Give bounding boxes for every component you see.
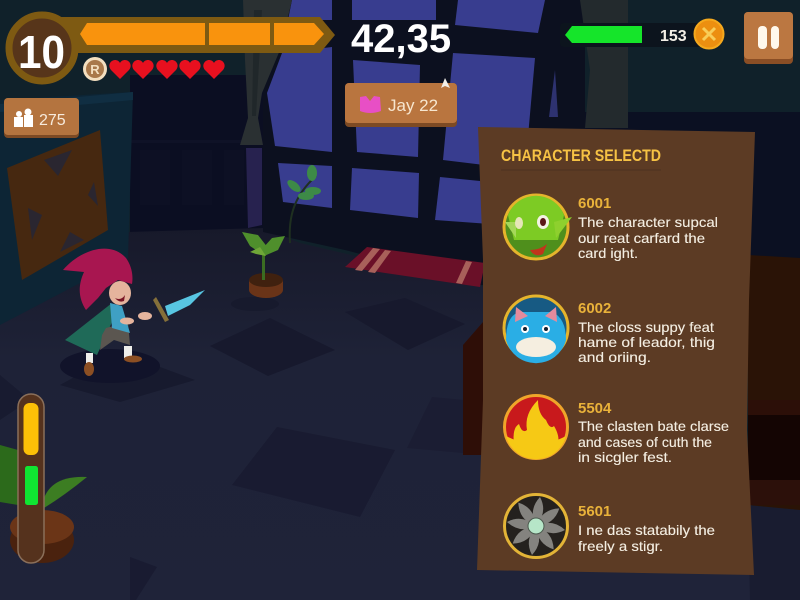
card 6001: card ight.	[578, 245, 638, 261]
score: 42,35	[351, 17, 451, 61]
level badge	[9, 15, 75, 81]
card 6002: and oriing.	[578, 349, 651, 365]
pause button	[744, 12, 793, 64]
rank coin: R	[90, 62, 100, 77]
card 5504	[504, 396, 729, 465]
left cabinet	[0, 92, 133, 325]
players count badge: 275	[39, 112, 66, 129]
potted plant	[231, 232, 285, 311]
icon: shuriken	[504, 494, 568, 558]
icon: cursor	[441, 78, 450, 88]
legs	[100, 322, 130, 350]
card 5504: 5504	[578, 400, 612, 417]
card 5601: freely a stigr.	[578, 538, 663, 554]
card 6001	[504, 195, 718, 261]
card 5504: in sicgler fest.	[578, 449, 672, 465]
level progress bar	[60, 17, 335, 53]
card 5601: I ne das statabily the	[578, 522, 715, 538]
window	[263, 0, 585, 285]
card 6002: The closs suppy feat	[578, 319, 714, 335]
card 6001: our reat carfard the	[578, 230, 705, 246]
hair	[63, 249, 132, 310]
right furniture	[463, 255, 800, 510]
torso	[110, 303, 130, 333]
card 5504: and cases of cuth the	[578, 434, 712, 450]
card 5601	[504, 494, 715, 558]
icon: goblin	[504, 195, 572, 259]
wainscot panels	[130, 140, 260, 143]
hero character with sword	[60, 249, 205, 383]
icon: blue cat	[504, 296, 568, 363]
curtain left	[240, 0, 292, 145]
sword	[165, 290, 205, 316]
rank coin	[83, 57, 107, 81]
card 6001: The character supcal	[578, 214, 718, 230]
lives row	[83, 57, 225, 81]
energy bar and coins	[560, 20, 724, 48]
curtain right	[580, 0, 628, 128]
red rug	[345, 247, 485, 287]
players count badge	[4, 98, 79, 138]
card 5504: The clasten bate clarse	[578, 418, 729, 434]
card 6002: hame of leador, thig	[578, 334, 715, 350]
cape	[65, 303, 112, 355]
icon: coin	[694, 20, 724, 48]
date badge: Jay 22	[388, 96, 438, 115]
heading: CHARACTER SELECTD	[501, 146, 661, 165]
card 5601: 5601	[578, 503, 611, 520]
wooden crossed panel	[7, 130, 108, 280]
card 6001: 6001	[578, 195, 611, 212]
icon: flame	[504, 396, 568, 459]
plant on window sill	[285, 165, 321, 243]
level badge: 10	[18, 26, 65, 78]
purple drape column	[246, 148, 262, 228]
bottom left stump with leaves	[0, 445, 87, 563]
energy bar and coins: 153	[660, 28, 687, 45]
vertical gauge	[18, 394, 44, 563]
icon: pink gift	[360, 96, 381, 113]
floor	[0, 228, 800, 600]
panel: character select	[477, 127, 755, 575]
card 6002	[504, 296, 715, 365]
face	[109, 281, 131, 305]
date badge	[345, 78, 457, 127]
card 6002: 6002	[578, 300, 611, 317]
hearts	[109, 60, 225, 79]
